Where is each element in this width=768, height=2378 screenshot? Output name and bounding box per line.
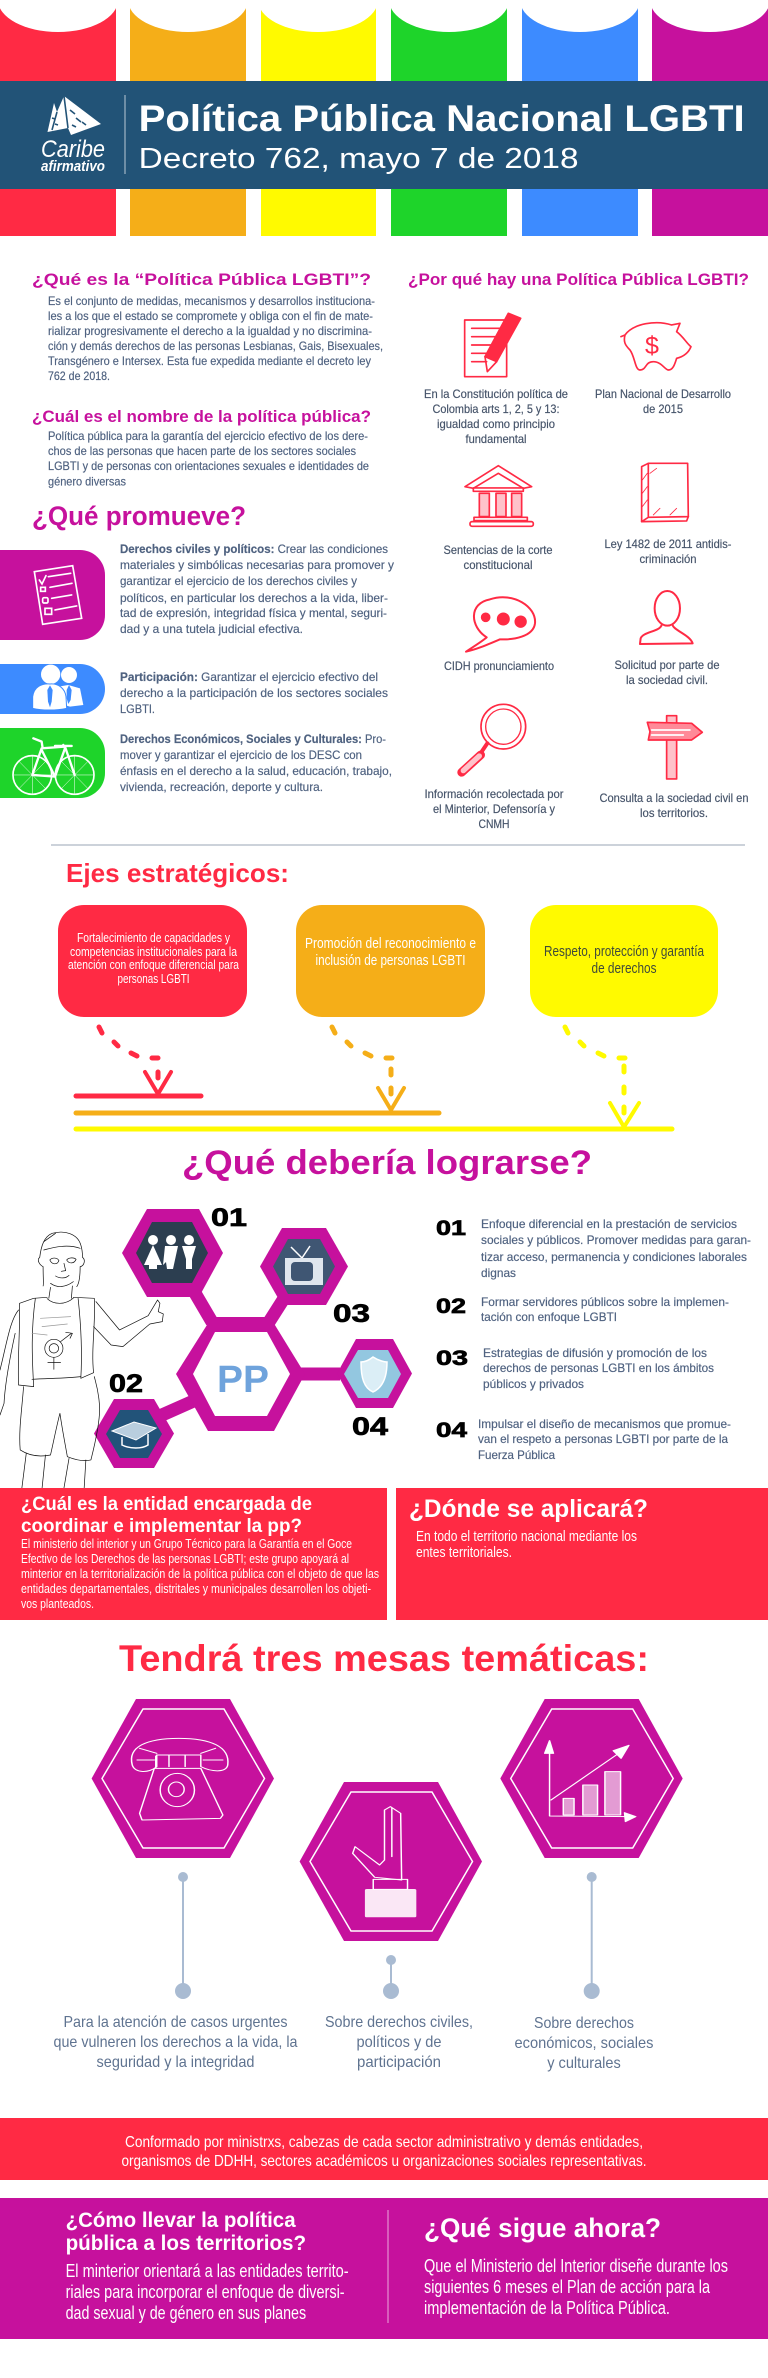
rainbow header columns [0,0,768,236]
icon: signpost [647,716,702,779]
band: conformado por: Conformado por ministrxs, cabezas de cada sector administrativo y demás entidades, [125,2134,643,2151]
panel: entidad encargada: minterior en la territorialización de la política pública con el objeto de que las [21,1566,379,1581]
item: CIDH [444,597,554,673]
icon: checklist [34,566,82,624]
panel: derechos civiles y políticos: dad y a una tutela judicial efectiva. [120,622,303,636]
panel: eje fortalecimiento: competencias institucionales para la [70,944,238,959]
section: nombre de la política: chos de las personas que hacen parte de los sectores sociales [48,444,356,458]
mesa 3 [500,1699,683,2072]
list: 03 [436,1346,714,1391]
hexagon: hand and ballot [300,1782,482,1941]
panel: derechos económicos: Derechos Económicos, Sociales y Culturales: Pro- [120,732,386,746]
panel: eje respeto: Respeto, protección y garantía [544,943,705,960]
illustration: person pointing [0,1232,163,1488]
item: información recolectada [424,704,564,831]
list: 01: 01 [436,1217,466,1240]
item: corte constitucional [444,466,553,572]
item: sociedad civil: Solicitud por parte de [614,658,720,672]
icon: document and pencil [465,313,521,377]
list: 04: 04 [436,1419,467,1442]
item: plan nacional [595,323,731,416]
item: sociedad civil [614,591,720,687]
section: Qué es la política: 762 de 2018. [48,369,110,383]
list: 03: Estrategias de difusión y promoción de los [483,1346,707,1360]
logo: Caribe afirmativo: Caribe [41,136,105,163]
hexagon: growth chart [500,1699,683,1858]
numbers on hexagons [109,1204,388,1441]
item: plan nacional: Plan Nacional de Desarrollo [595,387,731,401]
mesa 2: participación [357,2054,441,2071]
icon: temple [465,466,533,526]
item: corte constitucional: Sentencias de la corte [444,543,553,557]
numbers on hexagons: 04 [352,1413,388,1441]
list: 01 [436,1217,751,1280]
heading: Ejes estratégicos: Ejes estratégicos: [66,858,289,888]
heading: Por qué hay una política: ¿Por qué hay una Política Pública LGBTI? [408,270,749,289]
arrow: amarillo [76,1027,672,1129]
icon: person bust [640,591,693,644]
heading: Qué debería lograrse: ¿Qué debería lograrse? [182,1144,592,1182]
mesa 2: Sobre derechos civiles, [325,2014,473,2031]
list: 03: 03 [436,1347,468,1370]
section: nombre de la política: género diversas [48,474,126,488]
panel: participación: Participación: Garantizar el ejercicio efectivo del [120,670,378,684]
item: constitución: igualdad como principio [437,417,555,431]
text: cómo llevar: riales para incorporar el enfoque de diversi- [66,2282,345,2302]
section: nombre de la política: ¿Cuál es el nombre de la política pública? [32,407,371,426]
list: 02: 02 [436,1295,466,1318]
icon: book [642,463,688,522]
panel: eje fortalecimiento: Fortalecimiento de capacidades y [77,930,230,945]
panel: entidad encargada: ¿Cuál es la entidad encargada de [21,1494,312,1515]
item: plan nacional: $ [645,332,659,360]
hexagon: 03 [260,1228,348,1305]
item: sociedad civil: la sociedad civil. [626,673,708,687]
panel: eje respeto: de derechos [592,960,656,977]
text: qué sigue: implementación de la Política Pública. [424,2298,670,2318]
item: plan nacional: de 2015 [643,402,683,416]
item: constitución: En la Constitución política de [424,387,568,401]
mesa 3: económicos, sociales [514,2035,654,2052]
numbers on hexagons: 01 [211,1204,247,1232]
list: 02 [436,1295,729,1324]
panel: eje promoción: Promoción del reconocimiento e [305,935,476,952]
text: qué sigue: ¿Qué sigue ahora? [424,2213,661,2243]
panel: participación: derecho a la participación de los sectores sociales [120,686,388,700]
heading: Qué promueve: ¿Qué promueve? [32,501,246,531]
mesa 2: políticos y de [356,2034,442,2051]
item: constitución: fundamental [466,432,526,446]
text: cómo llevar: dad sexual y de género en sus planes [66,2303,306,2323]
panel: entidad encargada: coordinar e implementar la pp? [21,1516,302,1537]
panel: derechos económicos: énfasis en el derecho a la salud, educación, trabajo, [120,764,392,778]
hexagon: 02 [94,1399,174,1468]
section: nombre de la política: Política pública para la garantía del ejercicio efectivo de los dere- [48,429,368,443]
logo: Caribe afirmativo: afirmativo [41,158,105,175]
panel: eje fortalecimiento [58,905,247,1017]
section: Qué es la política: Transgénero e Intersex. Esta fue expedida mediante el decreto ley [48,354,371,368]
text: cómo llevar: El minterior orientará a las entidades territo- [66,2261,349,2281]
icon: speech bubble [466,597,535,652]
mesa 3: Sobre derechos [534,2015,634,2032]
panel: participación [0,664,388,716]
mesa 1: seguridad y la integridad [96,2054,254,2071]
item: consulta: los territorios. [640,806,708,820]
panel: derechos civiles y políticos [0,542,394,640]
list: 02: Formar servidores públicos sobre la implemen- [481,1295,729,1309]
panel: dónde se aplicará: En todo el territorio nacional mediante los [416,1528,637,1545]
list: 01: sociales y públicos. Promover medidas para garan- [481,1233,751,1247]
panel: entidad encargada: Efectivo de los Derechos de las personas LGBTI; este grupo apoyará al [21,1551,349,1566]
item: información recolectada: CNMH [478,817,510,831]
panel: entidad encargada: entidades departamentales, distritales y municipales desarrollen los objeti- [21,1581,371,1596]
list: 01: Enfoque diferencial en la prestación de servicios [481,1217,737,1231]
hexagon: central PP [176,1317,305,1431]
list: 02: tación con enfoque LGBTI [481,1310,617,1324]
mesa 1: Para la atención de casos urgentes [64,2014,288,2031]
panel: derechos civiles y políticos: materiales y simbólicas necesarias para promover y [120,558,394,572]
subtitle: Decreto 762, mayo 7 de 2018 [139,143,579,175]
section: Qué es la política: ción y demás derechos de las personas Lesbianas, Gais, Bisexuales, [48,339,383,353]
item: información recolectada: Información recolectada por [424,787,564,801]
list: 01: dignas [481,1266,516,1280]
item: ley 1482 [604,463,732,566]
section: Qué es la política: rializar progresivamente el derecho a la igualdad y no discrimina- [48,324,372,338]
panel: derechos económicos: vivienda, recreación, deporte y cultura. [120,780,323,794]
list: 01: tizar acceso, permanencia y condiciones laborales [481,1250,747,1264]
list: 04: van el respeto a personas LGBTI por parte de la [478,1432,728,1446]
panel: entidad encargada: El ministerio del interior y un Grupo Técnico para la Garantía en el Goce [21,1536,352,1551]
mesa 1 [54,1699,298,2071]
panel: derechos económicos [0,728,392,798]
section: Qué es la política [32,270,383,383]
section: Qué es la política: les a los que el estado se compromete y obliga con el fin de mate- [48,309,373,323]
list: 03: derechos de personas LGBTI en los ámbitos [483,1361,714,1375]
arrow: naranja [76,1027,439,1113]
band: conformado por: organismos de DDHH, sectores académicos u organizaciones sociales representativas. [122,2153,646,2170]
item: ley 1482: criminación [640,552,696,566]
panel: eje fortalecimiento: atención con enfoque diferencial para [68,957,240,972]
icon: people [33,665,83,710]
mesa 3: y culturales [547,2055,621,2072]
hexagon diagram [94,1204,412,1468]
item: información recolectada: el Minterior, Defensoría y [433,802,555,816]
panel: derechos económicos: mover y garantizar el ejercicio de los DESC con [120,748,362,762]
list: 03: públicos y privados [483,1377,584,1391]
section: nombre de la política: LGBTI y de personas con orientaciones sexuales e identidades de [48,459,369,473]
hexagon: telephone [92,1699,274,1858]
heading: Tendrá tres mesas temáticas: Tendrá tres mesas temáticas: [119,1638,649,1679]
item: constitución: Colombia arts 1, 2, 5 y 13: [432,402,560,416]
list: 04 [436,1417,731,1462]
hexagon: 04 [337,1339,412,1408]
panel: eje respeto [530,905,718,1017]
list: 04: Fuerza Pública [478,1448,555,1462]
list: 04: Impulsar el diseño de mecanismos que promue- [478,1417,731,1431]
panel: derechos civiles y políticos: garantizar el ejercicio de los derechos civiles y [120,574,357,588]
panel: dónde se aplicará [396,1488,768,1620]
numbers on hexagons: 03 [333,1300,370,1328]
hexagon: central PP: PP [217,1359,269,1401]
mesa 1: que vulneren los derechos a la vida, la [54,2034,298,2051]
numbers on hexagons: 02 [109,1370,143,1398]
panel: derechos civiles y políticos: políticos, en particular los derechos a la vida, liber- [120,591,388,605]
title banner [0,81,768,189]
item: constitución [424,313,568,446]
arrow: rojo [76,1027,201,1096]
hexagon: 01 [122,1209,223,1297]
section: Qué es la política: Es el conjunto de medidas, mecanismos y desarrollos instituciona- [48,294,375,308]
panel: eje fortalecimiento: personas LGBTI [118,971,190,986]
panel: dónde se aplicará: ¿Dónde se aplicará? [409,1495,648,1523]
item: consulta: Consulta a la sociedad civil en [600,791,748,805]
panel: entidad encargada: vos planteados. [21,1596,94,1611]
section: Qué es la política: ¿Qué es la “Política Pública LGBTI”? [32,270,371,289]
panel: eje promoción: inclusión de personas LGBTI [316,952,466,969]
item: ley 1482: Ley 1482 de 2011 antidis- [604,537,732,551]
text: cómo llevar: pública a los territorios? [66,2232,306,2255]
icon: bicycle [13,738,94,794]
icon: piggy bank [621,323,691,370]
band: conformado por [0,2118,768,2180]
panel: dónde se aplicará: entes territoriales. [416,1544,512,1561]
icon: magnifying glass [462,704,526,772]
panel: cómo llevar y qué sigue [0,2198,768,2339]
section: nombre de la política [32,407,371,488]
text: cómo llevar [66,2209,349,2323]
panel: derechos civiles y políticos: tad de expresión, integridad física y mental, seguri- [120,606,387,620]
mesa 2 [300,1782,482,2071]
panel: eje promoción [296,905,485,1017]
panel: derechos civiles y políticos: Derechos civiles y políticos: Crear las condiciones [120,542,388,556]
text: qué sigue [424,2213,728,2318]
panel: entidad encargada [0,1488,387,1620]
text: cómo llevar: ¿Cómo llevar la política [66,2209,296,2232]
panel: participación: LGBTI. [120,702,155,716]
item: consulta [600,716,748,820]
main title: Política Pública Nacional LGBTI [139,98,745,139]
item: corte constitucional: constitucional [464,558,532,572]
item: CIDH: CIDH pronunciamiento [444,659,554,673]
logo: Caribe afirmativo [41,96,105,175]
